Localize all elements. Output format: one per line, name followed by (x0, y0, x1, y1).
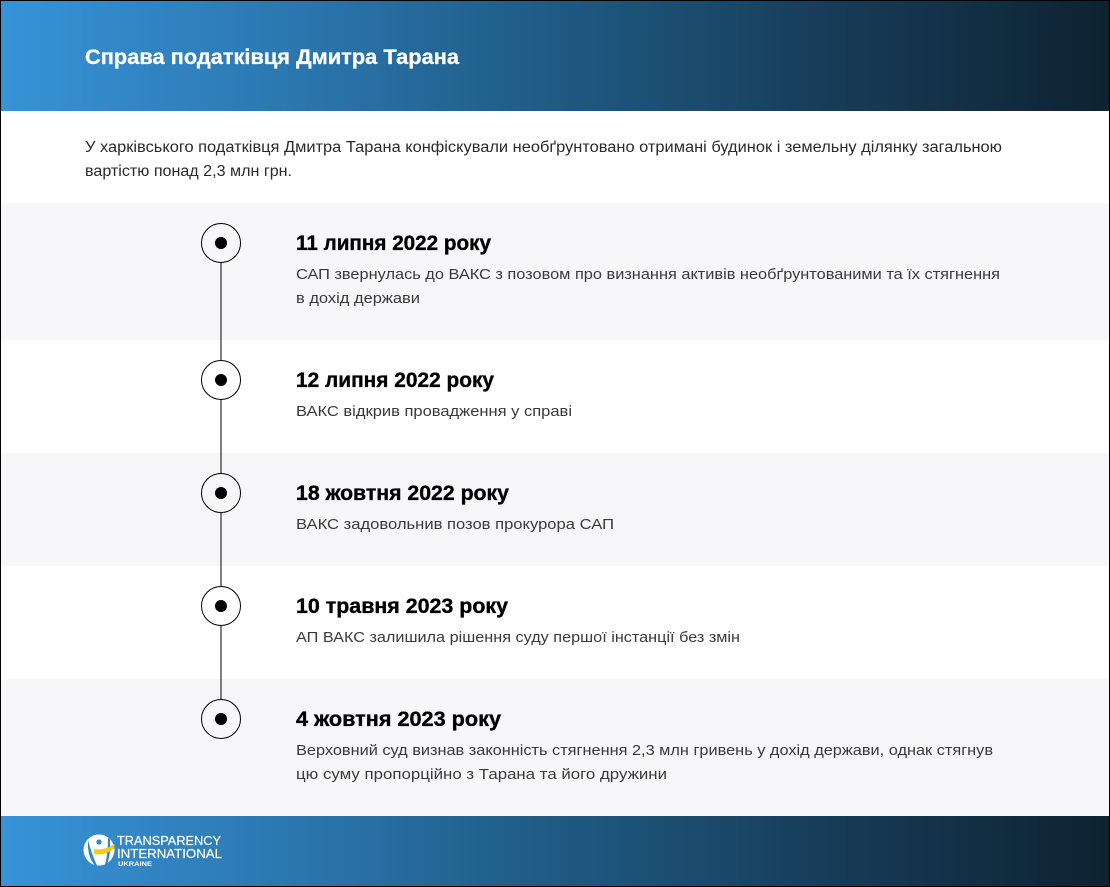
timeline (202, 224, 240, 738)
logo wordmark: UKRAINE (118, 861, 153, 868)
description: цю суму пропорційно з Тарана та його дружини (296, 766, 667, 783)
panel: 18 October 2022 (1, 453, 1109, 566)
description: САП звернулась до ВАКС з позовом про визнання активів необґрунтованими та їх стягнення (296, 266, 1000, 283)
intro text: вартістю понад 2,3 млн грн. (85, 163, 292, 180)
title: Справа податківця Дмитра Тарана (85, 46, 459, 69)
description: ВАКС відкрив провадження у справі (296, 403, 572, 420)
description (296, 742, 993, 783)
description (296, 266, 1000, 307)
logo: Transparency International Ukraine (84, 833, 222, 868)
panel: 11 July 2022 (1, 203, 1109, 340)
description: Верховний суд визнав законність стягнення 2,3 млн гривень у дохід держави, однак стягнув (296, 742, 993, 759)
panel: 4 October 2023 (1, 679, 1109, 816)
description: АП ВАКС залишила рішення суду першої інстанції без змін (296, 629, 740, 646)
date heading: 4 жовтня 2023 року (296, 708, 501, 731)
intro text (85, 139, 1002, 180)
description: ВАКС задовольнив позов прокурора САП (296, 516, 614, 533)
date heading: 10 травня 2023 року (296, 595, 508, 618)
intro text: У харківського податківця Дмитра Тарана конфіскували необґрунтовано отримані будинок і земельну ділянку загальною (85, 139, 1002, 156)
marker 4 (202, 586, 240, 626)
icon: globe figure (84, 834, 114, 866)
date heading: 12 липня 2022 року (296, 369, 494, 392)
header band (1, 1, 1109, 111)
date heading: 11 липня 2022 року (296, 232, 491, 255)
marker 1 (202, 224, 240, 262)
marker 3 (202, 474, 240, 512)
logo wordmark (117, 833, 222, 868)
date heading: 18 жовтня 2022 року (296, 482, 509, 505)
marker 2 (202, 360, 240, 400)
footer band (1, 816, 1109, 886)
description: в дохід держави (296, 290, 420, 307)
logo wordmark: TRANSPARENCY (117, 833, 221, 848)
panel: 12 July 2022 (1, 340, 1109, 453)
logo wordmark: INTERNATIONAL (117, 846, 222, 861)
marker 5 (202, 700, 240, 738)
panel: 10 May 2023 (1, 566, 1109, 679)
